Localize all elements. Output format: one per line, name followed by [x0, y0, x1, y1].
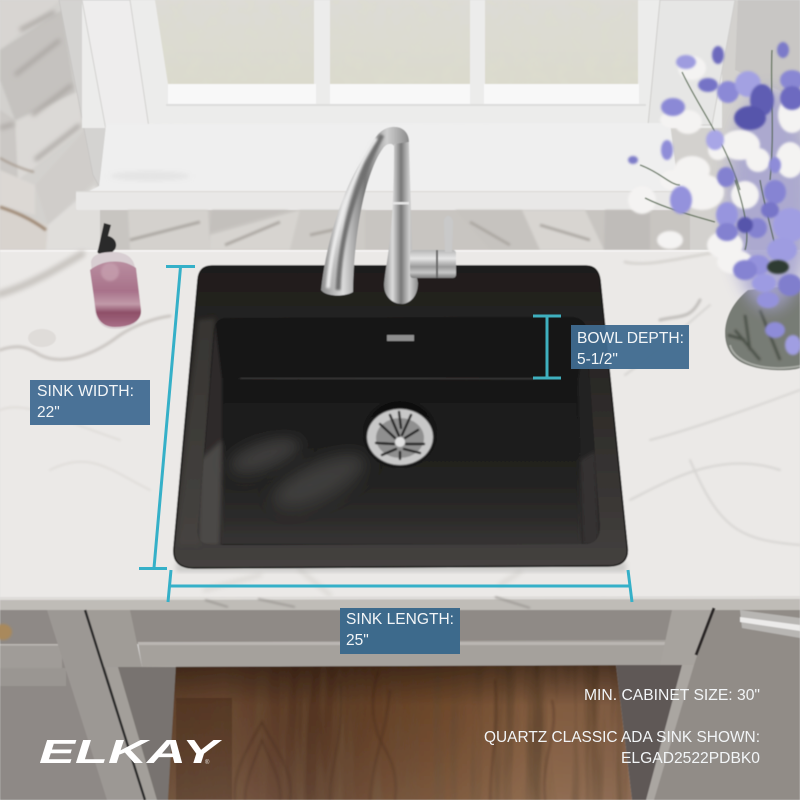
bottle glass	[91, 252, 141, 329]
vase	[725, 285, 800, 370]
window	[82, 0, 735, 130]
dimension line: bowl depth	[533, 316, 561, 378]
drain ring	[367, 409, 433, 465]
note: model shown: QUARTZ CLASSIC ADA SINK SHOWN:	[484, 729, 760, 746]
label: sink length: SINK LENGTH:	[346, 611, 454, 628]
left rim highlight	[178, 318, 215, 545]
white flowers	[628, 56, 800, 274]
faucet neck	[384, 142, 418, 304]
soap bottle	[90, 223, 141, 329]
bowl	[190, 310, 610, 550]
note: minimum cabinet size: MIN. CABINET SIZE: 30"	[584, 687, 760, 704]
center left stile upper	[87, 610, 142, 667]
flowers and vase	[628, 42, 800, 370]
countertop	[0, 250, 800, 600]
spout	[321, 127, 409, 296]
left cabinet door	[0, 610, 120, 800]
cabinet	[0, 608, 800, 800]
label: sink length: 25"	[346, 632, 369, 649]
left window trim	[82, 0, 149, 130]
faucet handle body	[410, 250, 456, 278]
background wall with chevron marble tile	[0, 0, 800, 260]
window sash	[166, 84, 646, 106]
dimension line: sink length	[168, 570, 632, 602]
right window trim	[648, 0, 735, 125]
label: sink length	[340, 608, 460, 654]
label: sink width	[30, 380, 150, 425]
bowl right wall	[580, 369, 594, 456]
logo: Elkay	[39, 733, 223, 770]
bowl left wall	[196, 320, 222, 546]
sink	[174, 266, 627, 568]
drain basket slots	[376, 412, 424, 459]
left stile	[47, 610, 144, 800]
window sill	[76, 123, 680, 210]
bottle pump	[97, 223, 116, 254]
countertop front edge	[0, 596, 800, 610]
dark door gap	[85, 610, 145, 800]
drain	[363, 400, 437, 468]
interior shadow left	[105, 667, 180, 800]
sill front edge	[76, 191, 676, 210]
marble reveal strip beside window	[59, 0, 106, 186]
faucet	[321, 127, 456, 304]
center left stile lower	[105, 667, 157, 800]
logo plate	[387, 335, 414, 341]
purple flowers	[628, 42, 800, 355]
window frame	[82, 0, 722, 128]
apron trim rail	[138, 640, 668, 667]
faucet lever	[444, 216, 453, 252]
brass knob	[0, 624, 12, 640]
logo: Elkay: ELKAY	[39, 733, 223, 770]
right stiles	[660, 610, 712, 665]
marble wall top right	[735, 0, 800, 100]
apron panel	[88, 610, 678, 644]
right interior shadow	[616, 665, 685, 800]
flower stems	[640, 50, 780, 270]
right cabinet door	[650, 610, 800, 800]
window glass panes	[155, 0, 638, 84]
sink rim	[174, 266, 627, 568]
label: bowl depth	[571, 325, 689, 369]
flower mass shadow	[728, 90, 800, 310]
backsplash tiles	[100, 210, 690, 252]
bowl crease highlight	[240, 378, 535, 379]
bowl floor	[222, 401, 582, 544]
dimension line: sink width	[139, 266, 195, 568]
label: bowl depth: BOWL DEPTH:	[577, 330, 684, 347]
note: model shown: ELGAD2522PDBK0	[621, 750, 760, 767]
bottle liquid	[90, 261, 141, 327]
label: bowl depth: 5-1/2"	[577, 351, 618, 368]
floor light patches	[226, 433, 304, 475]
flower center	[767, 260, 789, 274]
floor wood	[168, 665, 632, 800]
marble veins	[0, 252, 800, 595]
label: sink width: 22"	[37, 404, 60, 421]
countertop shadow under sink	[176, 562, 626, 572]
note: model shown	[484, 729, 760, 767]
dishwasher handle	[740, 610, 800, 638]
label: sink width: SINK WIDTH:	[37, 383, 134, 400]
logo: Elkay: ®	[205, 759, 210, 766]
